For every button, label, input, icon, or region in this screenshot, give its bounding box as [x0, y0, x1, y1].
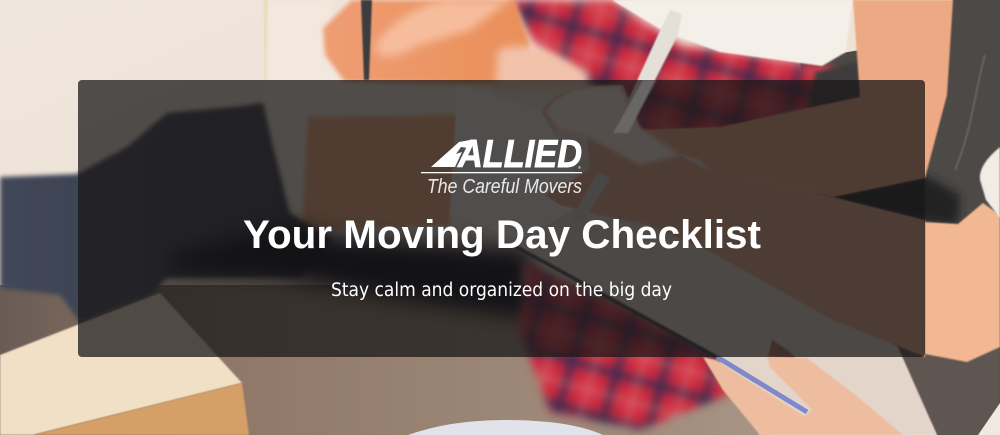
finger nail	[768, 340, 795, 358]
dark chair at right	[800, 0, 1000, 435]
chair seam lines	[955, 55, 985, 170]
cardboard box top	[0, 293, 242, 435]
dark patch between shirt and arm	[808, 62, 860, 108]
fingers of upper hand	[495, 46, 590, 90]
logo rule	[421, 172, 582, 173]
clipboard light corner	[453, 118, 456, 170]
pen upper hand	[361, 0, 372, 80]
clipboard edge in shadow	[515, 246, 717, 357]
forearm with writing hand	[542, 85, 925, 357]
white strip bottom right	[978, 403, 1000, 435]
white fabric at bottom	[408, 420, 603, 435]
floor	[0, 285, 770, 435]
right side arm	[925, 203, 1000, 362]
clipboard blue edge	[717, 357, 807, 412]
gold wall edge	[264, 0, 268, 85]
logo wing	[431, 140, 470, 167]
silver pen	[628, 10, 682, 118]
writing hand highlight	[545, 86, 680, 165]
lower holding hand	[703, 356, 903, 435]
upper-left writing hand	[323, 0, 530, 85]
finger highlights	[375, 0, 510, 56]
subtitle: Stay calm and organized on the big day	[331, 280, 672, 301]
chair lower section	[896, 346, 1000, 435]
title: Your Moving Day Checklist	[243, 213, 761, 257]
pale box flap	[264, 1, 268, 80]
registered mark: ®	[578, 165, 581, 170]
pen highlight through panel	[613, 80, 657, 133]
red plaid skirt lower	[520, 262, 728, 430]
dark translucent panel	[78, 80, 925, 357]
clipboard paper	[504, 154, 938, 435]
dark trouser shadow	[170, 225, 530, 318]
upper skin arm	[640, 0, 953, 197]
white shirt	[612, 0, 852, 66]
dark shadow beneath upper arm	[825, 175, 960, 224]
cardboard box side	[302, 115, 458, 230]
navy trouser leg	[0, 103, 333, 322]
logo wordmark: ALLIED	[457, 133, 582, 176]
silver pen lower section	[578, 172, 610, 212]
logo: Allied The Careful Movers	[421, 133, 582, 198]
white sleeve	[980, 147, 1000, 218]
cardboard box side lower	[33, 383, 249, 435]
logo tagline: The Careful Movers	[427, 176, 582, 198]
red plaid skirt upper	[510, 0, 860, 135]
